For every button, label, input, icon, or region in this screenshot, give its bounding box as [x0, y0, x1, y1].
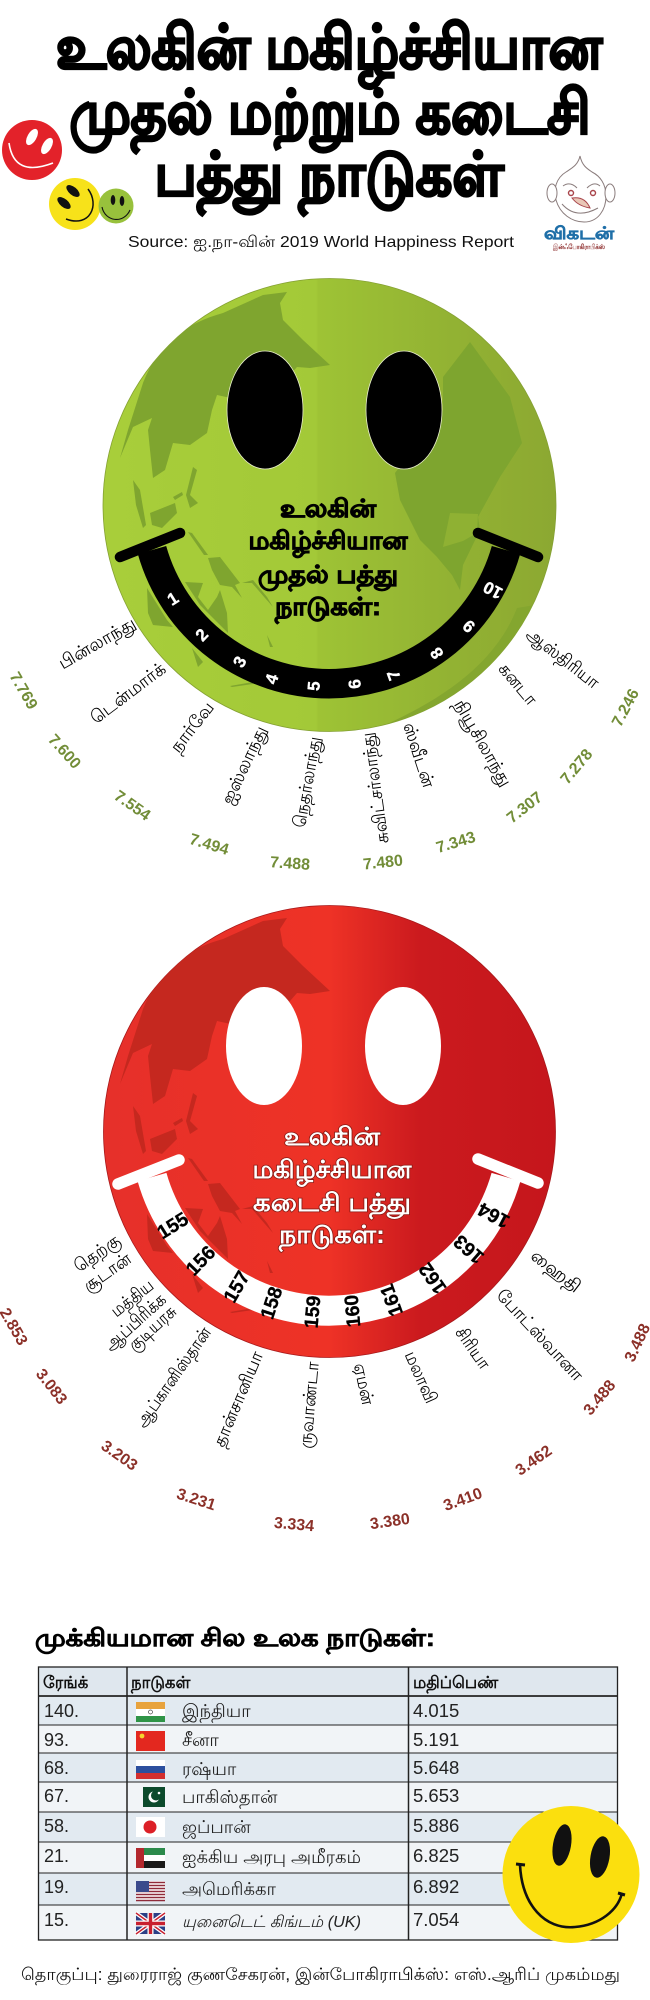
country names: ஜப்பான் — [182, 1817, 251, 1839]
values column: 5.653 — [413, 1785, 459, 1806]
happiness scores bottom ten: 3.083 — [32, 1366, 70, 1408]
table: selected countries — [38, 1667, 618, 1940]
heading in green face: நாடுகள்: — [274, 593, 381, 624]
eyes — [227, 351, 442, 469]
happiness scores top ten: 7.554 — [111, 788, 153, 825]
rank numbers 1 to 10: 9 — [459, 616, 479, 636]
rank numbers 1 to 10: 10 — [480, 577, 506, 603]
happiness scores bottom ten: 3.410 — [441, 1485, 485, 1515]
heading in green face: மகிழ்ச்சியான — [248, 527, 408, 558]
table grid — [38, 1667, 618, 1940]
heading in green face: முதல் பத்து — [258, 561, 398, 592]
rank numbers 155 to 164: 158 — [257, 1284, 288, 1322]
country labels bottom ten: சூடான் — [79, 1248, 136, 1297]
panel: bottom ten countries — [0, 906, 650, 1535]
rank numbers 155 to 164: 160 — [341, 1294, 365, 1328]
values column: 6.892 — [413, 1876, 459, 1897]
country labels bottom ten: ஏமன் — [350, 1361, 378, 1407]
rank numbers 1 to 10: 2 — [192, 625, 212, 645]
flag: USA — [136, 1881, 165, 1901]
rank numbers 1 to 10: 6 — [345, 678, 365, 690]
credits footer: தொகுப்பு: துரைராஜ் குணசேகரன், இன்போகிராபிக்ஸ்: எஸ்.ஆரிப் முகம்மது — [21, 1965, 620, 1986]
red smiley face — [104, 906, 556, 1358]
country names: அமெரிக்கா — [182, 1879, 276, 1899]
country labels bottom ten: சிரியா — [451, 1323, 495, 1373]
rank column: 19. — [44, 1877, 69, 1897]
happiness scores top ten — [6, 669, 643, 874]
title: முதல் மற்றும் கடைசி — [70, 79, 590, 155]
country names: ஐக்கிய அரபு அமீரகம் — [182, 1847, 361, 1867]
table header: நாடுகள் — [130, 1674, 191, 1693]
happiness scores top ten: 7.480 — [362, 852, 404, 874]
smile band — [120, 533, 538, 684]
rank numbers 155 to 164: 162 — [415, 1258, 451, 1298]
rank column: 93. — [44, 1730, 69, 1750]
happiness scores bottom ten: 3.488 — [581, 1377, 619, 1419]
rank column: 67. — [44, 1786, 69, 1806]
country labels bottom ten: மலாவி — [401, 1348, 441, 1406]
heading in red face: கடைசி பத்து — [253, 1189, 411, 1220]
heading in green face — [248, 495, 408, 624]
rank numbers 1 to 10: 3 — [229, 653, 251, 671]
green smiley face — [103, 278, 565, 745]
country labels top ten: சுவிட்சர்லாந்து — [357, 731, 395, 845]
happiness scores top ten: 7.307 — [504, 789, 546, 827]
rank numbers 155 to 164 — [153, 1198, 514, 1329]
rank numbers 1 to 10: 4 — [262, 671, 283, 686]
rank column: 15. — [44, 1910, 69, 1930]
heading in red face — [252, 1123, 412, 1252]
table rows background — [38, 1667, 618, 1940]
table header — [43, 1674, 499, 1693]
rank numbers 1 to 10: 5 — [304, 680, 324, 692]
title — [56, 14, 603, 217]
flag: Japan — [136, 1817, 165, 1837]
country names: சீனா — [182, 1730, 219, 1750]
title: பத்து நாடுகள் — [154, 141, 504, 217]
happiness scores top ten: 7.343 — [434, 829, 478, 857]
icon: small green smiley — [98, 188, 134, 224]
happiness scores bottom ten: 3.334 — [273, 1515, 315, 1535]
country labels bottom ten: ஆப்பிரிக்க — [100, 1289, 170, 1355]
country labels top ten: ஸ்வீடன் — [399, 720, 439, 790]
country labels bottom ten: மத்திய — [107, 1275, 159, 1323]
rank numbers 155 to 164: 157 — [219, 1267, 255, 1307]
happiness scores top ten: 7.769 — [6, 669, 40, 713]
values column: 7.054 — [413, 1909, 459, 1930]
flag: India — [136, 1702, 165, 1722]
table heading: முக்கியமான சில உலக நாடுகள்: — [35, 1625, 435, 1655]
heading in red face: நாடுகள்: — [278, 1221, 385, 1252]
happiness scores bottom ten: 3.203 — [98, 1438, 140, 1475]
rank numbers 1 to 10: 1 — [164, 588, 182, 610]
icon: small red smiley — [2, 120, 62, 180]
happiness scores bottom ten — [0, 1305, 650, 1535]
country labels bottom ten: ருவாண்டா — [295, 1360, 324, 1449]
happiness scores top ten: 7.600 — [44, 731, 84, 773]
icon: large yellow smiley — [502, 1806, 640, 1943]
heading in red face: உலகின் — [284, 1123, 381, 1151]
rank numbers 155 to 164: 164 — [474, 1198, 514, 1232]
title: உலகின் மகிழ்ச்சியான — [56, 14, 603, 89]
happiness scores top ten: 7.488 — [269, 854, 311, 874]
flag: Russia — [136, 1760, 165, 1779]
country labels bottom ten: குடியரசு — [124, 1301, 182, 1356]
rank numbers 155 to 164: 159 — [301, 1295, 325, 1329]
rank numbers 1 to 10 — [164, 577, 506, 692]
country labels bottom ten: ஆப்கானிஸ்தான் — [131, 1323, 217, 1432]
country names: பாகிஸ்தான் — [182, 1787, 278, 1809]
country names: யுனைடெட் கிங்டம் (UK) — [182, 1914, 361, 1931]
rank column: 21. — [44, 1846, 69, 1866]
country labels top ten: நியூசிலாந்து — [448, 696, 516, 791]
rank column: 58. — [44, 1816, 69, 1836]
eyes — [226, 987, 441, 1105]
country labels top ten: பின்லாந்து — [55, 613, 140, 675]
heading in green face: உலகின் — [280, 495, 377, 523]
rank numbers 1 to 10: 7 — [383, 667, 405, 683]
country labels top ten: ஆஸ்திரியா — [521, 623, 604, 695]
country labels top ten — [55, 613, 604, 845]
flag: China — [136, 1731, 165, 1751]
flag: UAE — [136, 1848, 165, 1868]
country labels top ten: டென்மார்க் — [86, 658, 170, 728]
country labels top ten: நெதர்லாந்து — [289, 735, 327, 829]
icon: vikatan logo: விகடன் — [544, 224, 615, 243]
rank numbers 155 to 164: 155 — [153, 1208, 193, 1244]
values column: 5.886 — [413, 1815, 459, 1836]
values column: 4.015 — [413, 1700, 459, 1721]
rank column — [44, 1701, 79, 1930]
happiness scores top ten: 7.246 — [609, 686, 643, 730]
icon: vikatan logo — [544, 156, 615, 251]
country labels bottom ten: ஹைதி — [526, 1245, 585, 1298]
country labels top ten: கனடா — [495, 659, 542, 710]
rank column: 68. — [44, 1758, 69, 1778]
rank numbers 155 to 164: 161 — [376, 1281, 408, 1319]
table header: ரேங்க் — [43, 1674, 89, 1692]
country labels bottom ten: தெற்கு — [70, 1230, 125, 1278]
flag: UK — [136, 1913, 165, 1934]
country names: ரஷ்யா — [182, 1759, 237, 1779]
icon: small yellow smiley — [49, 178, 101, 230]
values column — [413, 1700, 459, 1930]
country labels top ten: நார்வே — [166, 698, 220, 758]
rank numbers 1 to 10: 8 — [427, 644, 447, 662]
table header: மதிப்பெண் — [413, 1674, 499, 1693]
country labels bottom ten — [70, 1230, 588, 1451]
happiness scores bottom ten: 3.380 — [369, 1511, 411, 1533]
country labels bottom ten: தான்சானியா — [209, 1348, 269, 1451]
country names: இந்தியா — [182, 1701, 251, 1723]
heading in red face: மகிழ்ச்சியான — [252, 1156, 412, 1187]
icon: vikatan logo: இன்ஃபோகிராபிக்ஸ் — [552, 243, 605, 251]
happiness scores bottom ten: 3.231 — [174, 1486, 218, 1514]
rank column: 140. — [44, 1701, 79, 1721]
values column: 6.825 — [413, 1845, 459, 1866]
happiness scores top ten: 7.494 — [187, 831, 231, 859]
panel: top ten happiest countries — [6, 278, 643, 874]
country labels top ten: ஐஸ்லாந்து — [217, 723, 273, 808]
source line: Source: ஐ.நா-வின் 2019 World Happiness Report — [128, 234, 515, 251]
country labels bottom ten: போட்ஸ்வானா — [492, 1285, 588, 1385]
smile band — [118, 1159, 538, 1311]
country names — [182, 1701, 361, 1931]
rank numbers 155 to 164: 156 — [182, 1242, 220, 1280]
happiness scores top ten: 7.278 — [558, 746, 596, 788]
happiness scores bottom ten: 3.462 — [513, 1442, 555, 1479]
values column: 5.191 — [413, 1729, 459, 1750]
flag: Pakistan — [143, 1787, 165, 1807]
rank numbers 155 to 164: 163 — [449, 1230, 488, 1268]
values column: 5.648 — [413, 1757, 459, 1778]
